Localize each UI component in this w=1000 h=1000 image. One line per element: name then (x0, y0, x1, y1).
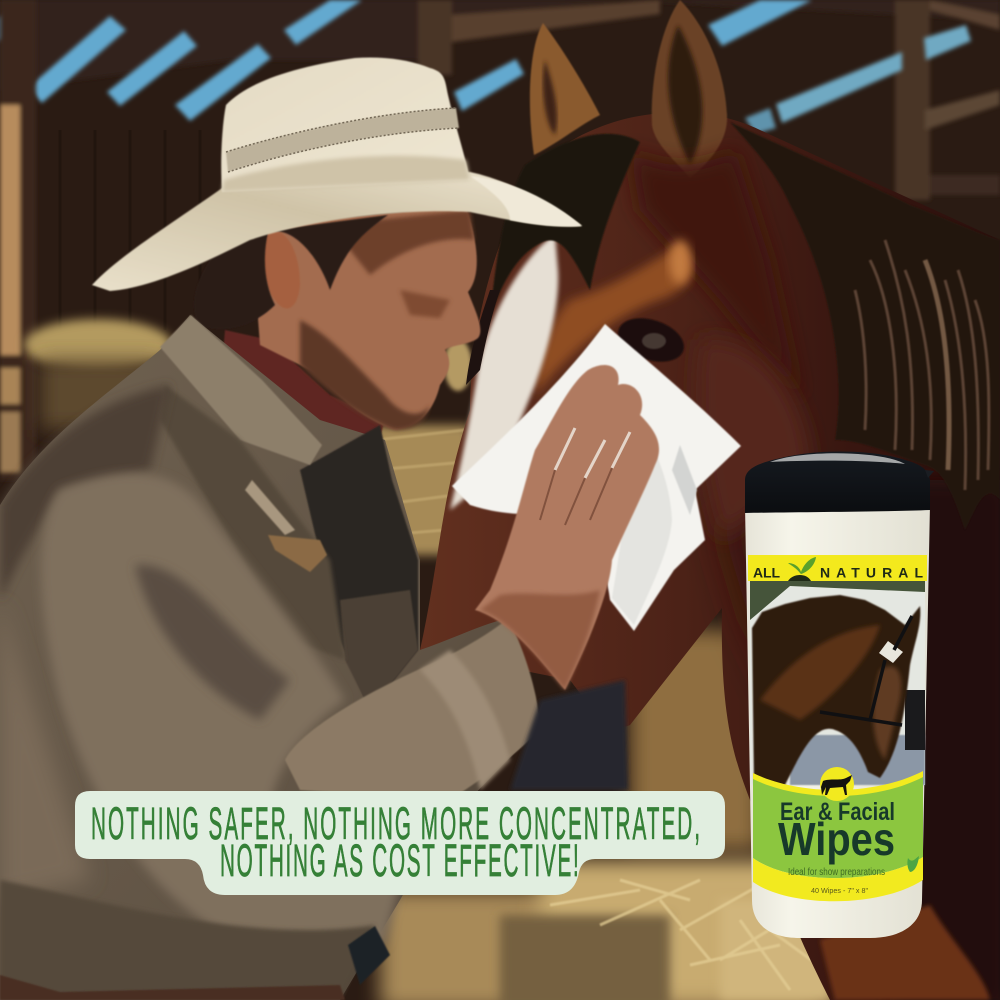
all natural label (753, 564, 923, 580)
product: wipes canister: 40 Wipes - 7" x 8" (811, 888, 869, 895)
horse logo badge (820, 767, 854, 801)
crown base shade (222, 156, 470, 192)
roof beams (0, 0, 1000, 200)
mane highlights (855, 240, 989, 490)
face (255, 205, 480, 430)
hand on wipe (475, 365, 659, 690)
wipe cloth (452, 324, 741, 631)
dark shadow right (890, 480, 1000, 1000)
banner text line 1: NOTHING SAFER, NOTHING MORE CONCENTRATED, (91, 799, 700, 849)
left ear (530, 23, 600, 155)
mane (730, 122, 1000, 530)
eye (612, 310, 690, 370)
hay bales (24, 319, 840, 1000)
neck lower brown (820, 905, 990, 1000)
banner text line 2: NOTHING AS COST EFFECTIVE! (220, 836, 579, 886)
all natural label: ALL (753, 564, 780, 580)
hat brim (92, 172, 582, 291)
horse (420, 0, 1000, 1000)
product name: Ear & Facial (780, 798, 895, 826)
label green panel (753, 775, 923, 878)
caption banner (75, 791, 725, 895)
cheek highlight (696, 339, 810, 540)
product: wipes canister (745, 452, 934, 938)
label yellow bands (753, 771, 923, 796)
upper arm lit (41, 474, 400, 950)
left post (0, 0, 36, 480)
small print: Ideal for show preparations (788, 867, 885, 878)
face shadow (300, 320, 430, 430)
brim edge light (470, 176, 582, 227)
belt (0, 975, 345, 1000)
horse body and head (420, 112, 1000, 1000)
collar (160, 315, 322, 465)
brow shadow (330, 210, 474, 275)
chest placket dark (300, 425, 418, 710)
white blaze (450, 234, 558, 510)
lid (745, 452, 930, 513)
hat crown (221, 57, 470, 192)
blue undershirt (510, 680, 628, 790)
shoulder shadow (0, 385, 170, 600)
jacket body (0, 315, 540, 1000)
right ear (652, 0, 727, 178)
neck and red shirt (220, 330, 385, 470)
product name: Wipes (778, 813, 895, 865)
lower jacket (0, 880, 375, 1000)
leaf logo (788, 557, 816, 581)
product name (778, 798, 895, 865)
ear (263, 231, 300, 308)
top yellow band (748, 555, 927, 581)
label photo (750, 580, 925, 785)
emblem on chest (268, 535, 327, 572)
forelock (490, 134, 640, 320)
man (0, 205, 628, 1000)
forehead dark (630, 150, 800, 400)
skylights (0, 0, 971, 134)
all natural label: NATURAL (820, 564, 923, 580)
hat band weave (226, 108, 459, 172)
sleeve shadow folds (135, 565, 290, 720)
canister body (745, 505, 930, 938)
brand mark (907, 856, 919, 872)
forehead lit patch (535, 245, 691, 395)
banner background (75, 791, 725, 895)
cowboy hat (92, 57, 582, 291)
cuff and forearm (285, 618, 540, 800)
hair (194, 215, 388, 329)
